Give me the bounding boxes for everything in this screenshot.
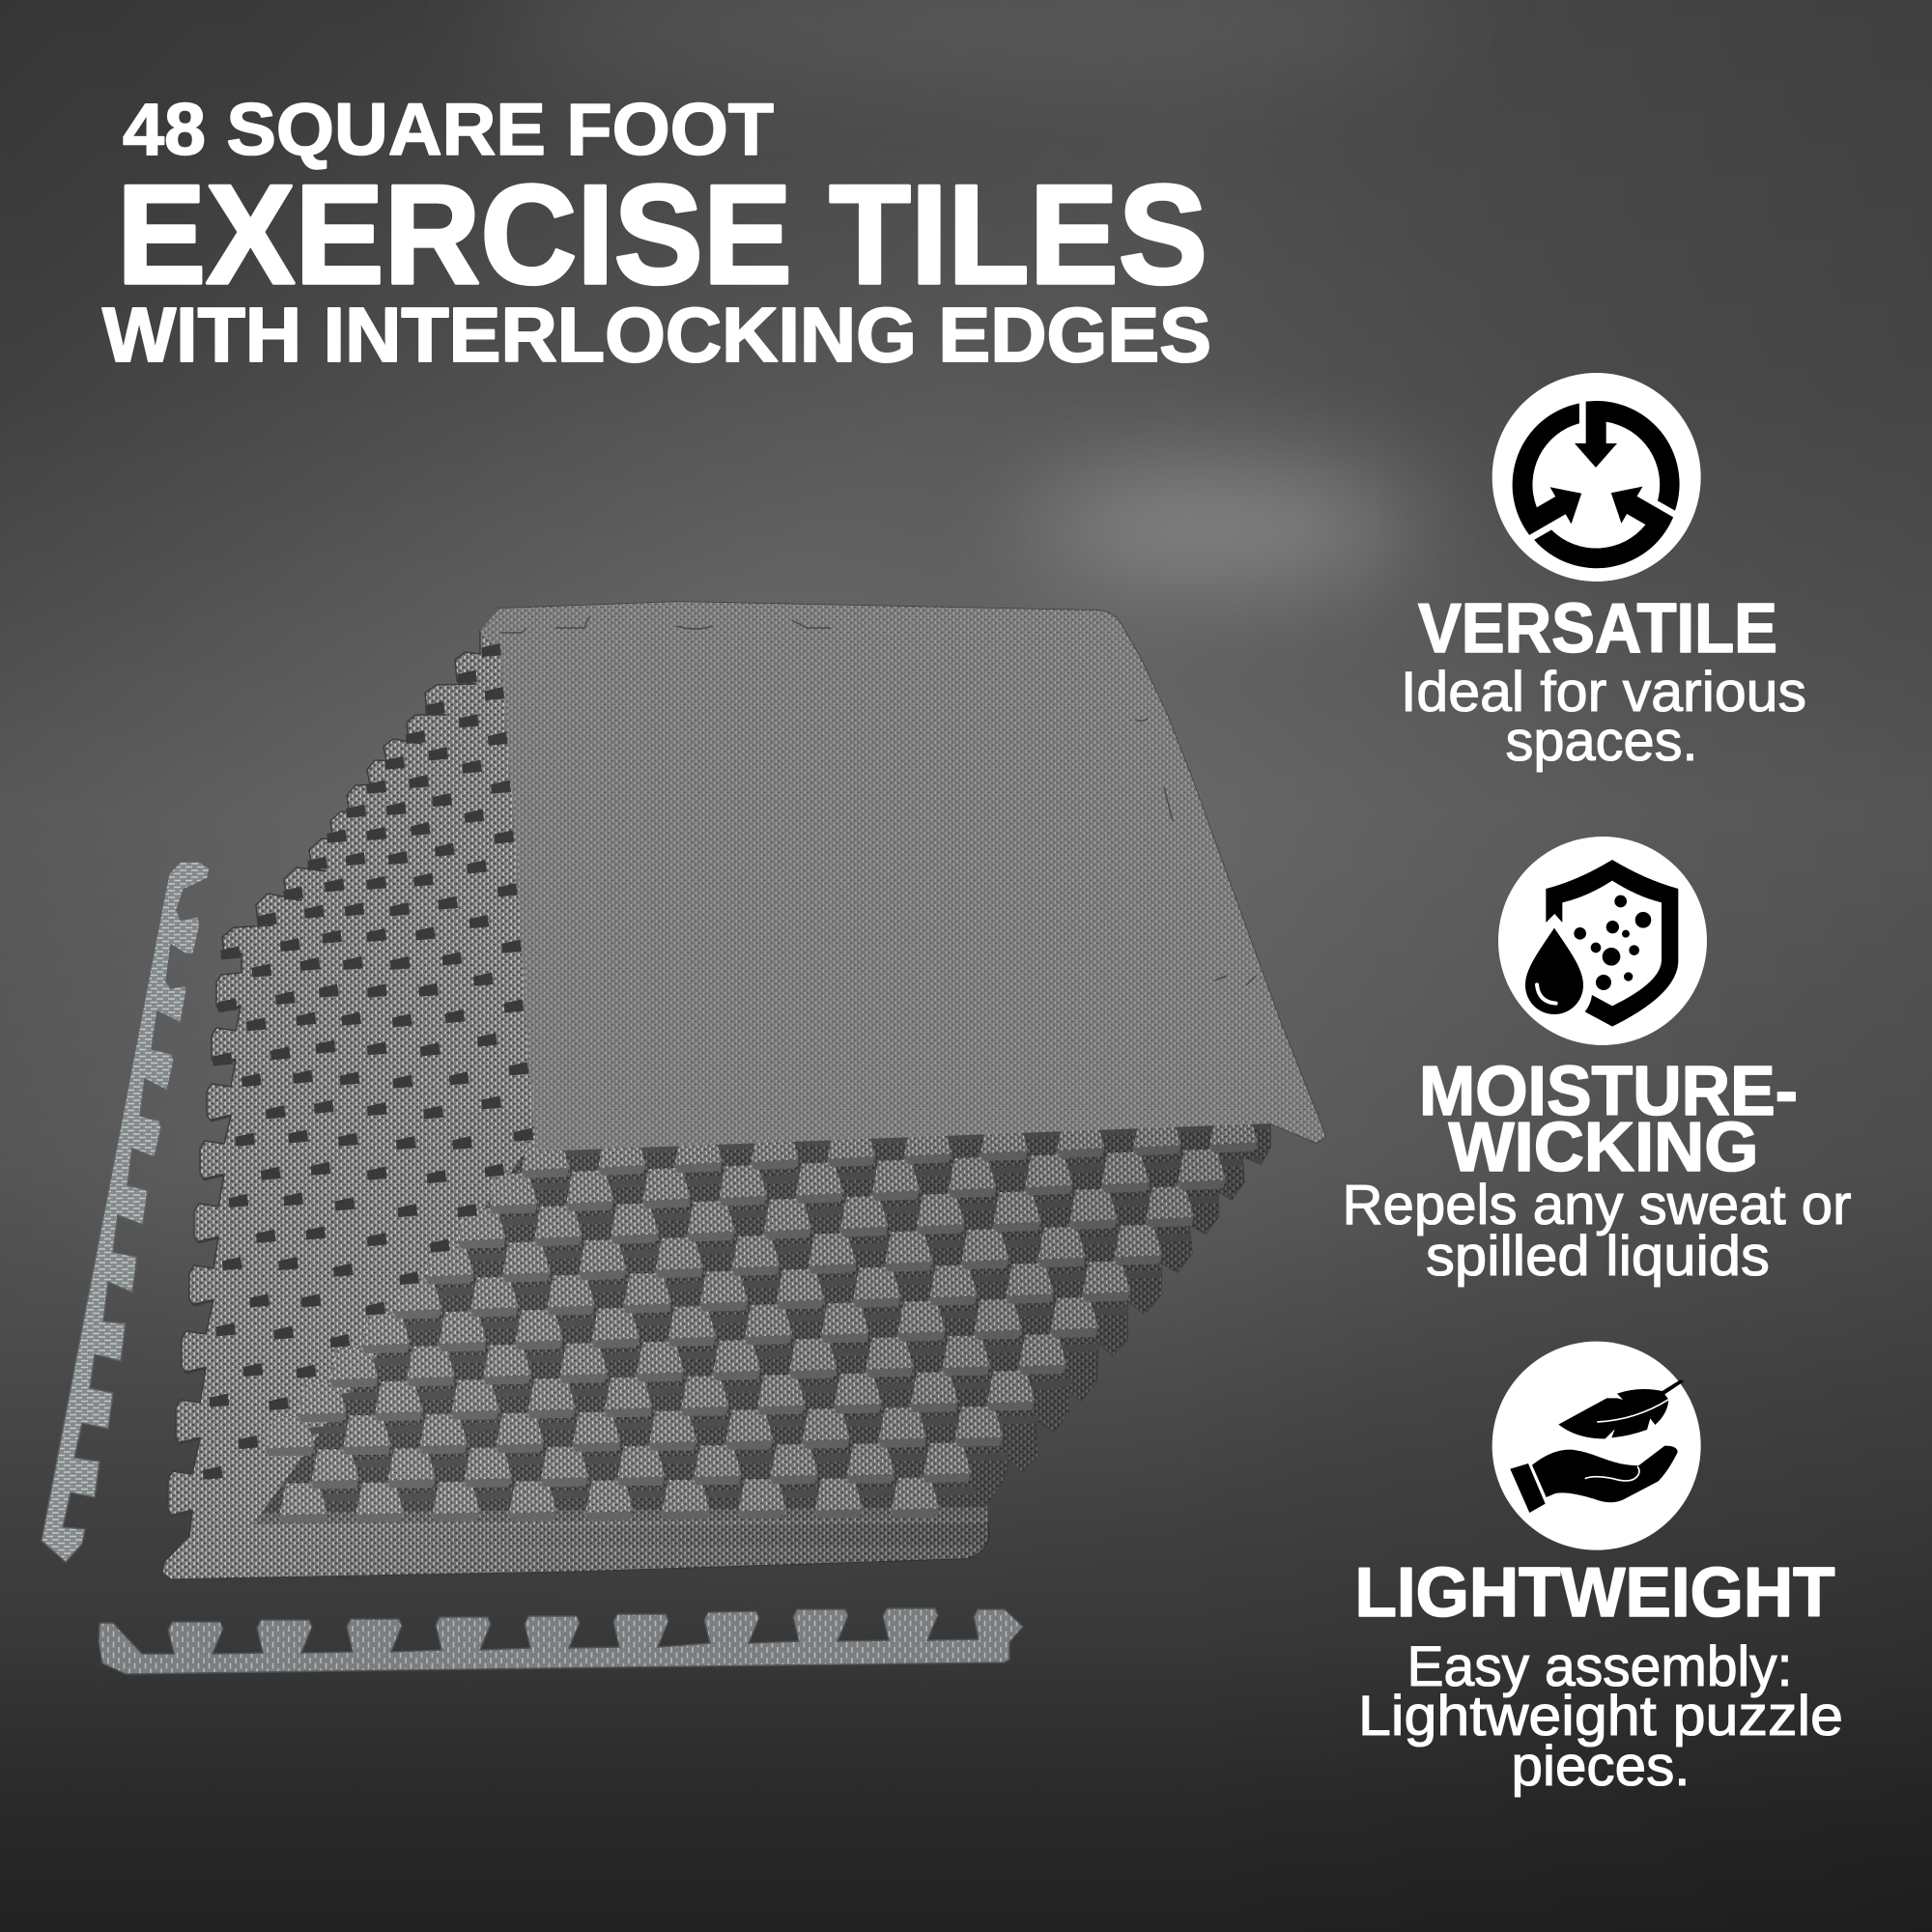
title: EXERCISE TILES [117, 156, 1208, 313]
feature text: moisture-wicking [1343, 1053, 1851, 1288]
peg notches, lower left of stack [203, 1070, 533, 1480]
top tile face [480, 602, 1325, 1151]
top tile edge markings [500, 616, 1256, 985]
title [102, 89, 1211, 378]
soft transition to bottom tile [242, 1507, 991, 1528]
feature text: versatile: VERSATILE [1418, 590, 1777, 668]
feature text: moisture-wicking: spilled liquids [1426, 1225, 1770, 1288]
feature text: lightweight: LIGHTWEIGHT [1354, 1554, 1835, 1632]
shaded lower stack [253, 1116, 1275, 1524]
title: 48 SQUARE FOOT [123, 89, 774, 171]
right-side shading of stack [636, 1123, 1270, 1546]
product photo: stack of interlocking foam tiles [42, 602, 1325, 1674]
icon: feather over open hand [1492, 1342, 1701, 1550]
peg notches, upper left of stack [213, 643, 528, 1075]
stacked tile body [162, 602, 1325, 1579]
feature text: moisture-wicking: WICKING [1449, 1109, 1758, 1186]
feature text: moisture-wicking: MOISTURE- [1419, 1053, 1798, 1130]
interlocking teeth rows [266, 1110, 1295, 1523]
feature text: moisture-wicking: Repels any sweat or [1343, 1174, 1851, 1236]
tooth undersides on left edge [172, 1007, 241, 1516]
feature text: versatile [1401, 590, 1806, 773]
feature text: lightweight: pieces. [1511, 1735, 1690, 1798]
feature text: versatile: Ideal for various [1401, 661, 1806, 724]
title: WITH INTERLOCKING EDGES [102, 292, 1211, 378]
bottom border strip [99, 1608, 1023, 1674]
feature text: lightweight [1354, 1554, 1843, 1798]
feature text: lightweight: Easy assembly: [1406, 1635, 1793, 1698]
feature text: lightweight: Lightweight puzzle [1358, 1685, 1843, 1747]
icon: versatile circular arrows [1482, 373, 1701, 599]
right fade of bottom tile [310, 1519, 989, 1577]
icon: moisture shield with droplet [1498, 837, 1707, 1045]
left border strip [42, 862, 210, 1562]
feature text: versatile: spaces. [1505, 710, 1698, 773]
